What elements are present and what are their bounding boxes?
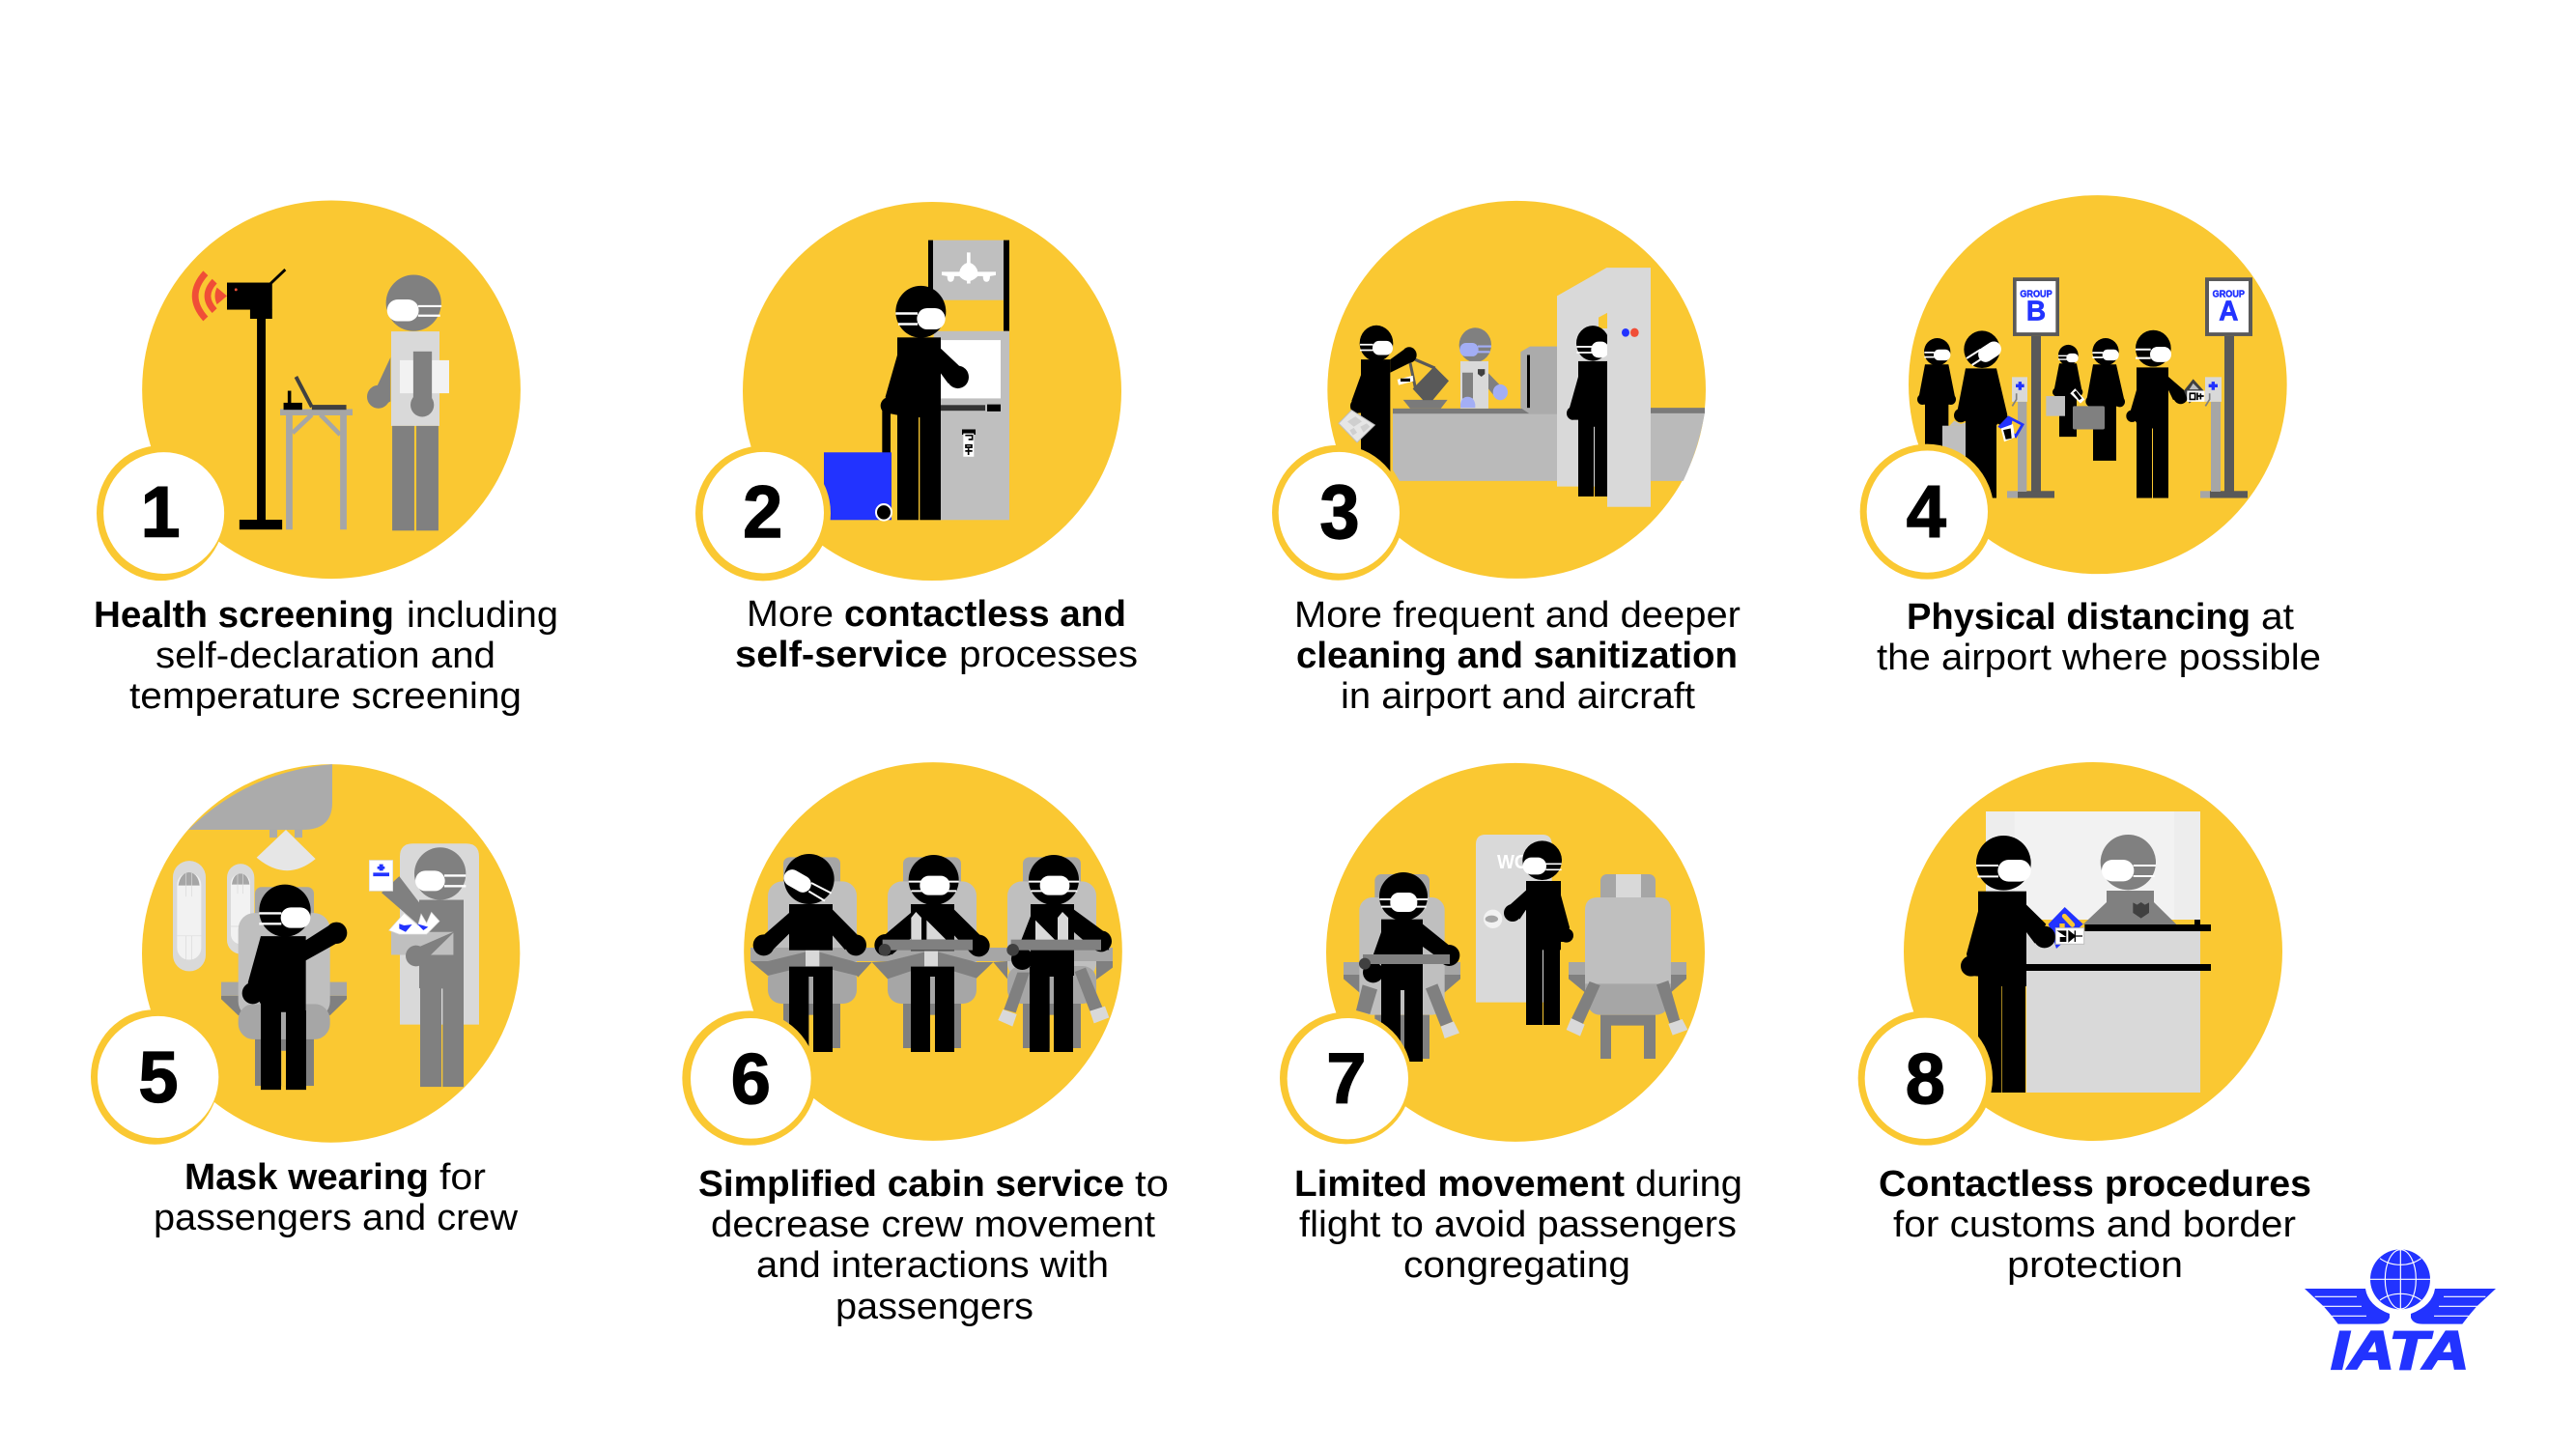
illustration 8 <box>1858 762 2282 1146</box>
number badge 4: 4 <box>1907 469 1946 553</box>
illustration 1 <box>97 200 521 581</box>
caption 5: passengers and crew <box>154 1198 519 1238</box>
yellow circle <box>1904 762 2282 1141</box>
panel 4: physical distancing <box>1860 195 2321 678</box>
figure: passenger with tray, third <box>998 855 1112 1052</box>
figure: passenger sleeping <box>753 854 866 1052</box>
IATA logo <box>2305 1249 2496 1380</box>
number badge 1 <box>97 445 225 581</box>
number badge 6 <box>682 1010 817 1146</box>
icon: small case <box>2046 396 2065 416</box>
icon: sign group A <box>2200 277 2252 498</box>
figure: passenger d <box>2085 338 2125 461</box>
figure: cabin crew <box>369 843 479 1087</box>
icon: lavatory door <box>1476 835 1552 1003</box>
figure: passenger with tray and bottle <box>874 855 990 1052</box>
icon: conveyor and x-ray box <box>1393 347 1705 481</box>
icon: globe <box>2370 1249 2430 1309</box>
caption 8: Contactless procedures <box>1879 1164 2311 1205</box>
number badge 3 <box>1272 445 1404 581</box>
number badge 4 <box>1860 444 1994 580</box>
yellow circle <box>142 764 520 1143</box>
icon: lavatory door: WC <box>1497 852 1528 873</box>
caption 7: Limited movement <box>1294 1164 1625 1205</box>
caption 6: and interactions with <box>756 1245 1109 1286</box>
yellow circle <box>743 202 1121 581</box>
icon: counter <box>2026 920 2211 1093</box>
illustration 6 <box>682 762 1122 1146</box>
panel 7: limited movement <box>1280 763 1742 1286</box>
icon: overhead bin and light <box>188 764 332 870</box>
caption 6: passengers <box>835 1287 1033 1327</box>
icon: empty seat back view <box>1567 874 1687 1059</box>
icon: sign group A: GROUP <box>2213 289 2245 300</box>
figure: seated passenger <box>1356 872 1459 1062</box>
number badge 8: 8 <box>1906 1039 1945 1120</box>
figure: seated passenger <box>242 885 347 1090</box>
yellow circle <box>744 762 1122 1141</box>
icon: boarding pass and passport <box>1997 415 2024 441</box>
icon: walk-through scanner back <box>1557 268 1651 507</box>
caption 3: in airport and aircraft <box>1341 676 1695 717</box>
caption 4 <box>1877 597 2321 678</box>
yellow circle <box>1909 195 2287 574</box>
caption 6: to <box>1135 1164 1169 1205</box>
caption 7: flight to avoid passengers <box>1299 1205 1737 1245</box>
number badge 5: 5 <box>138 1036 179 1118</box>
panel 6: simplified cabin service <box>682 762 1169 1327</box>
caption 7: congregating <box>1403 1245 1630 1286</box>
figure: border officer <box>2083 835 2176 924</box>
panel 1: health screening <box>94 200 558 717</box>
panel 2: contactless and self-service <box>695 202 1138 675</box>
caption 2: More <box>747 594 834 635</box>
figure: screening officer <box>367 275 449 530</box>
illustration 3 <box>1272 201 1706 581</box>
number badge 2 <box>695 445 831 581</box>
icon: self-service kiosk <box>928 241 1009 520</box>
icon: passenger seat <box>221 887 347 1086</box>
caption 6: Simplified cabin service <box>698 1164 1124 1205</box>
caption 3 <box>1294 595 1741 717</box>
caption 5: for <box>439 1157 486 1198</box>
figure: passenger a <box>1917 338 1956 450</box>
icon: thermal camera on pole <box>195 270 285 529</box>
yellow circle <box>142 200 521 579</box>
icon: sign group B <box>2007 277 2059 498</box>
number badge 3: 3 <box>1319 469 1360 554</box>
icon: dark case and tag <box>2070 388 2105 429</box>
icon: left seat <box>1344 874 1460 1059</box>
icon: sanitizer dispenser A <box>2205 377 2222 492</box>
caption 7: during <box>1635 1164 1742 1205</box>
number badge 6: 6 <box>731 1038 771 1119</box>
number badge 2: 2 <box>743 470 782 553</box>
caption 5 <box>154 1157 519 1238</box>
caption 2: self-service <box>735 635 948 675</box>
icon: sanitizer dispenser B <box>2012 377 2027 492</box>
figure: passenger at border <box>1961 836 2031 1093</box>
caption 8: protection <box>2007 1245 2183 1286</box>
illustration 4 <box>1860 195 2287 580</box>
number badge 5 <box>91 1009 219 1145</box>
panel 5: mask wearing <box>91 764 520 1238</box>
icon: suitcase a <box>1942 421 1976 461</box>
yellow circle <box>1326 763 1705 1142</box>
caption 2: processes <box>959 635 1138 675</box>
caption 1: including <box>407 595 558 636</box>
number badge 7: 7 <box>1326 1038 1367 1119</box>
figure: security agent <box>1459 327 1508 409</box>
caption 6 <box>698 1164 1169 1327</box>
number badge 8 <box>1858 1010 1993 1146</box>
caption 7 <box>1294 1164 1742 1286</box>
figure: passenger at kiosk <box>881 286 969 520</box>
caption 6: decrease crew movement <box>711 1205 1155 1245</box>
icon: passport and boarding pass <box>2026 905 2084 949</box>
icon: sign group B: B <box>2026 296 2046 327</box>
caption 3: cleaning and sanitization <box>1296 636 1738 676</box>
icon: blue suitcase <box>824 410 892 521</box>
caption 1: Health screening <box>94 595 394 636</box>
caption 4: the airport where possible <box>1877 638 2321 678</box>
icon: sign group B: GROUP <box>2020 289 2052 300</box>
illustration 7 <box>1280 763 1705 1144</box>
caption 2 <box>735 594 1138 675</box>
panel 8: contactless procedures <box>1858 762 2311 1286</box>
icon: table with laptop <box>280 377 353 529</box>
figure: passenger c <box>2052 345 2082 437</box>
caption 1: temperature screening <box>129 676 522 717</box>
icon: seat row <box>750 857 1113 1052</box>
caption 4: Physical distancing <box>1907 597 2250 638</box>
caption 2: contactless and <box>844 594 1126 635</box>
icon: sign group A: A <box>2219 296 2238 327</box>
illustration 2 <box>695 202 1121 581</box>
caption 5: Mask wearing <box>184 1157 429 1198</box>
icon: scanning pass <box>2184 379 2205 404</box>
caption 3: More frequent and deeper <box>1294 595 1741 636</box>
icon: cabin windows <box>173 861 254 971</box>
caption 1: self-declaration and <box>156 636 495 676</box>
caption 8 <box>1879 1164 2311 1286</box>
icon: right wing <box>2411 1289 2496 1324</box>
icon: glass screen <box>1986 811 2200 920</box>
icon: bag on tray <box>1398 359 1449 409</box>
logo wordmark: IATA <box>2331 1321 2469 1380</box>
panel 3: cleaning and sanitization <box>1272 201 1741 717</box>
number badge 1: 1 <box>141 471 180 553</box>
figure: standing passenger <box>1504 840 1573 1025</box>
caption 1 <box>94 595 558 717</box>
illustration 5 <box>91 764 520 1145</box>
figure: passenger e <box>2126 330 2188 498</box>
caption 8: for customs and border <box>1893 1205 2296 1245</box>
icon: left wing <box>2305 1289 2390 1324</box>
figure: passenger with bag <box>1339 326 1417 473</box>
number badge 7 <box>1280 1012 1412 1144</box>
figure: passenger b <box>1954 330 2008 498</box>
figure: passenger in scanner <box>1567 326 1609 497</box>
yellow circle <box>1327 201 1706 579</box>
caption 4: at <box>2261 597 2294 638</box>
icon: scanner front pillar <box>1607 313 1651 507</box>
